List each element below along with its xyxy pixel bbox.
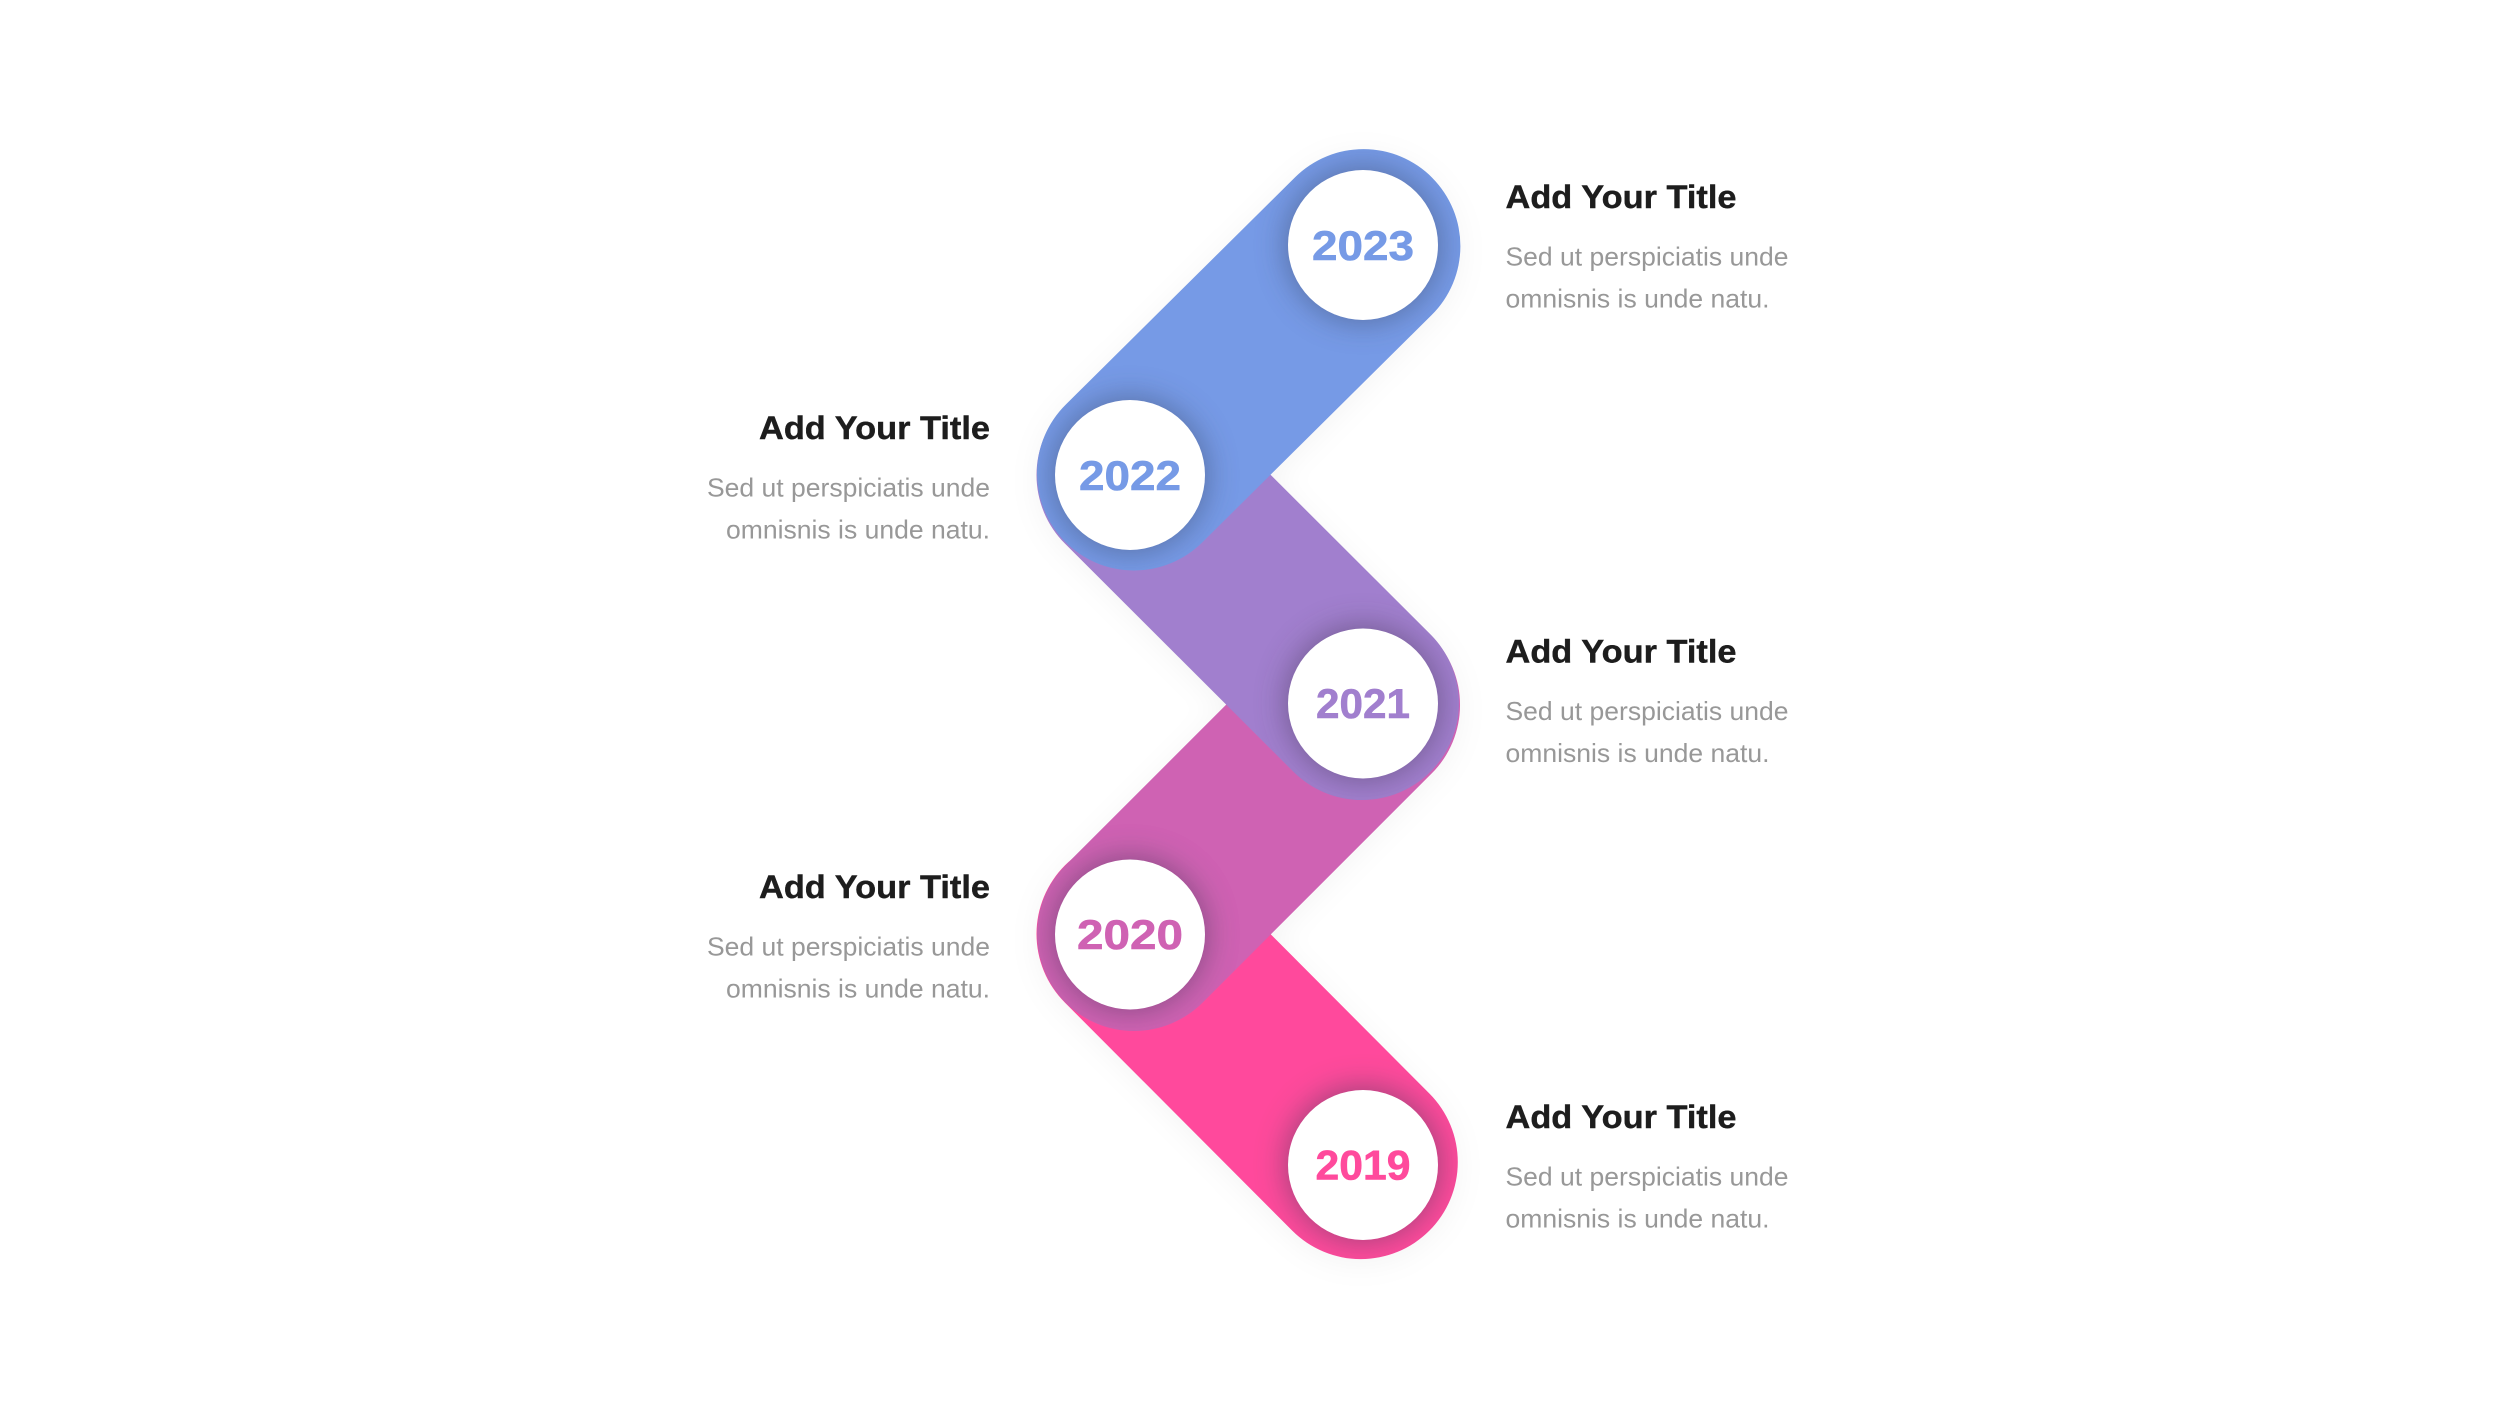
text block 2021: Sed ut perspiciatis unde bbox=[1506, 696, 1788, 726]
year badge 2021: 2021 bbox=[1316, 680, 1410, 727]
text block 2021: omnisnis is unde natu. bbox=[1506, 738, 1770, 768]
text block 2023: omnisnis is unde natu. bbox=[1506, 284, 1770, 314]
text block 2023: Add Your Title bbox=[1506, 179, 1736, 215]
text block 2019: Sed ut perspiciatis unde bbox=[1506, 1162, 1788, 1192]
band: 2019 pink bbox=[1036, 858, 1458, 1260]
text block 2019: Add Your Title bbox=[1506, 1099, 1736, 1135]
text block 2021 bbox=[1506, 634, 1788, 768]
band: 2020 magenta bbox=[1037, 650, 1460, 1031]
year badge 2023: 2023 bbox=[1312, 222, 1414, 269]
band: 2021 purple bbox=[1036, 431, 1459, 800]
text block 2019: omnisnis is unde natu. bbox=[1506, 1204, 1770, 1234]
text block 2020 bbox=[707, 869, 990, 1004]
text block 2021: Add Your Title bbox=[1506, 634, 1736, 670]
year badge 2022 bbox=[1055, 400, 1205, 550]
text block 2020: Add Your Title bbox=[759, 869, 990, 905]
text block 2022: omnisnis is unde natu. bbox=[726, 514, 990, 544]
text block 2023 bbox=[1506, 179, 1788, 314]
chevron ribbon bbox=[1036, 149, 1460, 1260]
text block 2023: Sed ut perspiciatis unde bbox=[1506, 242, 1788, 272]
year badge 2020: 2020 bbox=[1077, 911, 1183, 958]
year badge 2019: 2019 bbox=[1316, 1142, 1410, 1188]
text block 2022: Add Your Title bbox=[759, 410, 990, 446]
text block 2020: omnisnis is unde natu. bbox=[726, 974, 990, 1004]
text block 2019 bbox=[1506, 1099, 1788, 1234]
year badge 2020 bbox=[1055, 860, 1205, 1010]
band: 2022-2023 blue bbox=[1037, 149, 1460, 570]
year badge 2023 bbox=[1288, 170, 1438, 320]
text block 2022 bbox=[707, 410, 990, 544]
text block 2020: Sed ut perspiciatis unde bbox=[707, 932, 990, 962]
year badge 2019 bbox=[1288, 1090, 1438, 1240]
year badge 2022: 2022 bbox=[1079, 452, 1181, 499]
text block 2022: Sed ut perspiciatis unde bbox=[707, 472, 990, 502]
year badge 2021 bbox=[1288, 628, 1438, 778]
